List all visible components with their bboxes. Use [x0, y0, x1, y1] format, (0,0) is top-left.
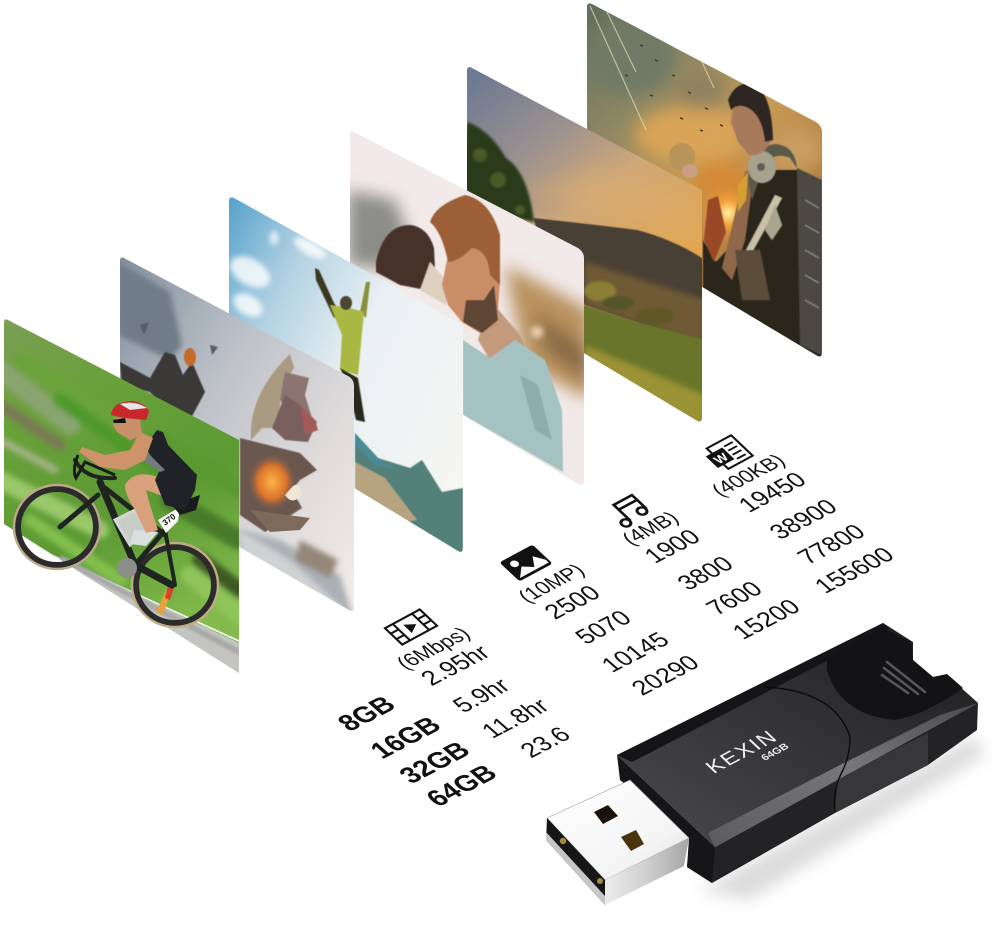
bike frame	[60, 460, 175, 585]
smoke	[240, 530, 354, 620]
photo column: (10MP)	[513, 560, 590, 607]
document column: 155600	[809, 543, 901, 598]
helmet	[111, 401, 149, 420]
connector contacts	[560, 838, 603, 884]
slider ridges	[882, 662, 925, 694]
crank	[117, 558, 137, 578]
bird specks	[625, 45, 723, 131]
capacity table	[331, 435, 901, 812]
cyclist and bicycle	[14, 401, 218, 627]
drop shadow	[700, 735, 985, 900]
road	[62, 561, 239, 673]
column icon: Word document: W	[710, 450, 732, 466]
row labels: 64GB	[420, 760, 504, 812]
photo panel: couple	[345, 125, 590, 490]
music column: (4MB)	[617, 508, 684, 549]
shoe	[130, 530, 158, 546]
row labels	[331, 691, 504, 812]
music column	[617, 508, 807, 644]
torso and shorts	[145, 430, 197, 510]
photo column: 2500	[539, 581, 607, 624]
document column	[707, 451, 901, 598]
rear wheel	[132, 543, 218, 627]
column icon: music note	[606, 495, 652, 528]
photo panel: sunset landscape	[460, 60, 710, 430]
photo column: 20290	[626, 651, 706, 700]
sliding cap outline	[763, 687, 850, 812]
highlight band	[708, 703, 978, 847]
row labels: 8GB	[331, 691, 402, 736]
photo column: 10145	[596, 628, 676, 677]
motion blur streaks	[0, 360, 240, 615]
photo panel: dragon on rock	[115, 250, 360, 620]
connector holes	[594, 805, 618, 824]
person	[315, 268, 370, 422]
tree	[460, 122, 534, 222]
top dark edge	[617, 623, 890, 762]
sun glow	[702, 190, 738, 240]
saddle bag	[172, 495, 200, 515]
dragon	[251, 354, 318, 442]
dark lower part	[703, 170, 822, 360]
number tag	[158, 507, 180, 533]
front wheel	[14, 485, 100, 569]
column icon: film reel	[385, 609, 437, 645]
video column: 11.8hr	[476, 694, 555, 743]
photo column	[513, 560, 706, 700]
fire glow	[250, 456, 294, 508]
photo panel: man on mountain with raised arms	[224, 190, 470, 560]
video column: 2.95hr	[415, 641, 496, 690]
soldier	[703, 83, 822, 360]
woman	[376, 225, 450, 305]
rock	[240, 438, 317, 532]
document column: (400KB)	[707, 451, 791, 501]
thumb slider recess	[827, 628, 963, 720]
row labels: 16GB	[364, 712, 448, 764]
hills	[533, 218, 705, 345]
photo panel: cyclist	[0, 315, 245, 680]
music column: 3800	[672, 552, 740, 595]
head	[113, 418, 142, 440]
video column: (6Mbps)	[392, 624, 475, 674]
mountains	[355, 433, 463, 560]
arm	[79, 432, 153, 470]
left end face	[617, 755, 715, 883]
music column: 7600	[701, 577, 769, 620]
video column	[392, 624, 577, 763]
music column: 1900	[639, 525, 707, 568]
meadow	[583, 305, 705, 430]
face	[731, 101, 772, 155]
cyclist and bicycle: 370	[160, 511, 178, 528]
video column: 5.9hr	[447, 674, 516, 717]
photo panel: movie scene with soldier	[580, 0, 830, 365]
cliff	[118, 262, 182, 360]
row labels: 32GB	[393, 737, 477, 789]
body lower side	[687, 703, 978, 883]
capacity label: 64GB	[759, 742, 792, 763]
body top face	[617, 623, 978, 847]
woman head	[669, 143, 698, 178]
brand name: KEXIN	[701, 727, 783, 777]
USB flash drive	[546, 623, 985, 905]
document column: 38900	[764, 495, 844, 544]
man	[430, 195, 563, 472]
creature silhouette	[120, 322, 218, 420]
column icon: Word document	[701, 435, 753, 472]
photo column: 5070	[570, 606, 638, 649]
blurred background	[348, 190, 590, 400]
document column: 19450	[733, 468, 813, 517]
video column: 23.6	[515, 723, 577, 763]
falling streaks	[590, 6, 714, 130]
leg	[125, 474, 168, 533]
column icon: picture	[499, 545, 553, 581]
document column: 77800	[792, 520, 872, 569]
USB connector	[546, 780, 689, 905]
music column: 15200	[727, 595, 807, 644]
handlebar	[74, 455, 115, 478]
